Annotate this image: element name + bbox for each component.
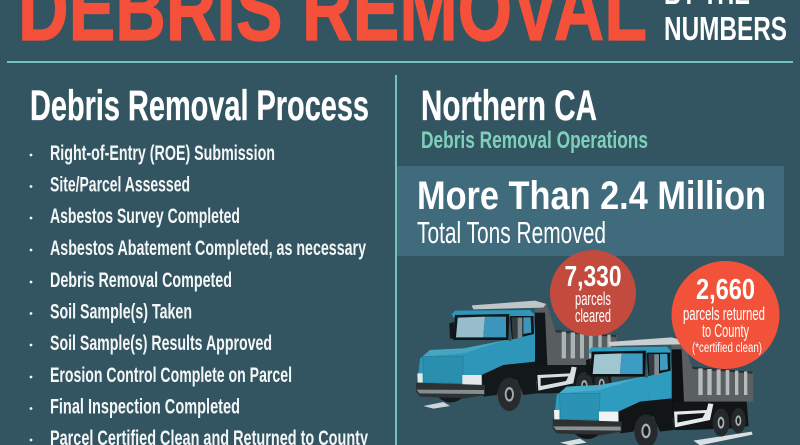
callout: parcels cleared	[550, 250, 636, 336]
process list: Right-of-Entry (ROE) Submission	[50, 142, 275, 165]
callout: parcels returned to county: 2,660	[696, 274, 755, 306]
callout: parcels cleared: parcels	[575, 289, 611, 309]
process list: Erosion Control Complete on Parcel	[50, 364, 292, 387]
process list: Site/Parcel Assessed	[50, 174, 190, 196]
panel: debris removal process	[30, 82, 369, 445]
callout: parcels returned to county: to County	[702, 321, 749, 341]
process list	[30, 142, 368, 445]
process list: Soil Sample(s) Taken	[50, 300, 192, 324]
process list: Asbestos Survey Completed	[50, 205, 240, 228]
callout: parcels cleared: 7,330	[564, 261, 622, 293]
heading: debris removal process: Debris Removal Process	[30, 82, 369, 130]
callout: parcels cleared: cleared	[575, 306, 611, 326]
process list: Asbestos Abatement Completed, as necessary	[50, 237, 366, 260]
stat band: total tons removed: Total Tons Removed	[417, 215, 606, 250]
process list: Final Inspection Completed	[50, 396, 240, 418]
callout: parcels returned to county: (*certified clean)	[692, 339, 762, 355]
illustration: front dump truck	[553, 337, 753, 445]
callout: parcels returned to county	[672, 261, 780, 369]
stat band: total tons removed	[397, 166, 784, 256]
process list: Debris Removal Competed	[50, 269, 232, 292]
process list: Soil Sample(s) Results Approved	[50, 332, 272, 355]
heading: northern CA: Northern CA	[421, 82, 597, 130]
subheading: debris removal operations: Debris Removal Operations	[421, 127, 648, 154]
illustration: rear dump truck	[416, 301, 617, 411]
